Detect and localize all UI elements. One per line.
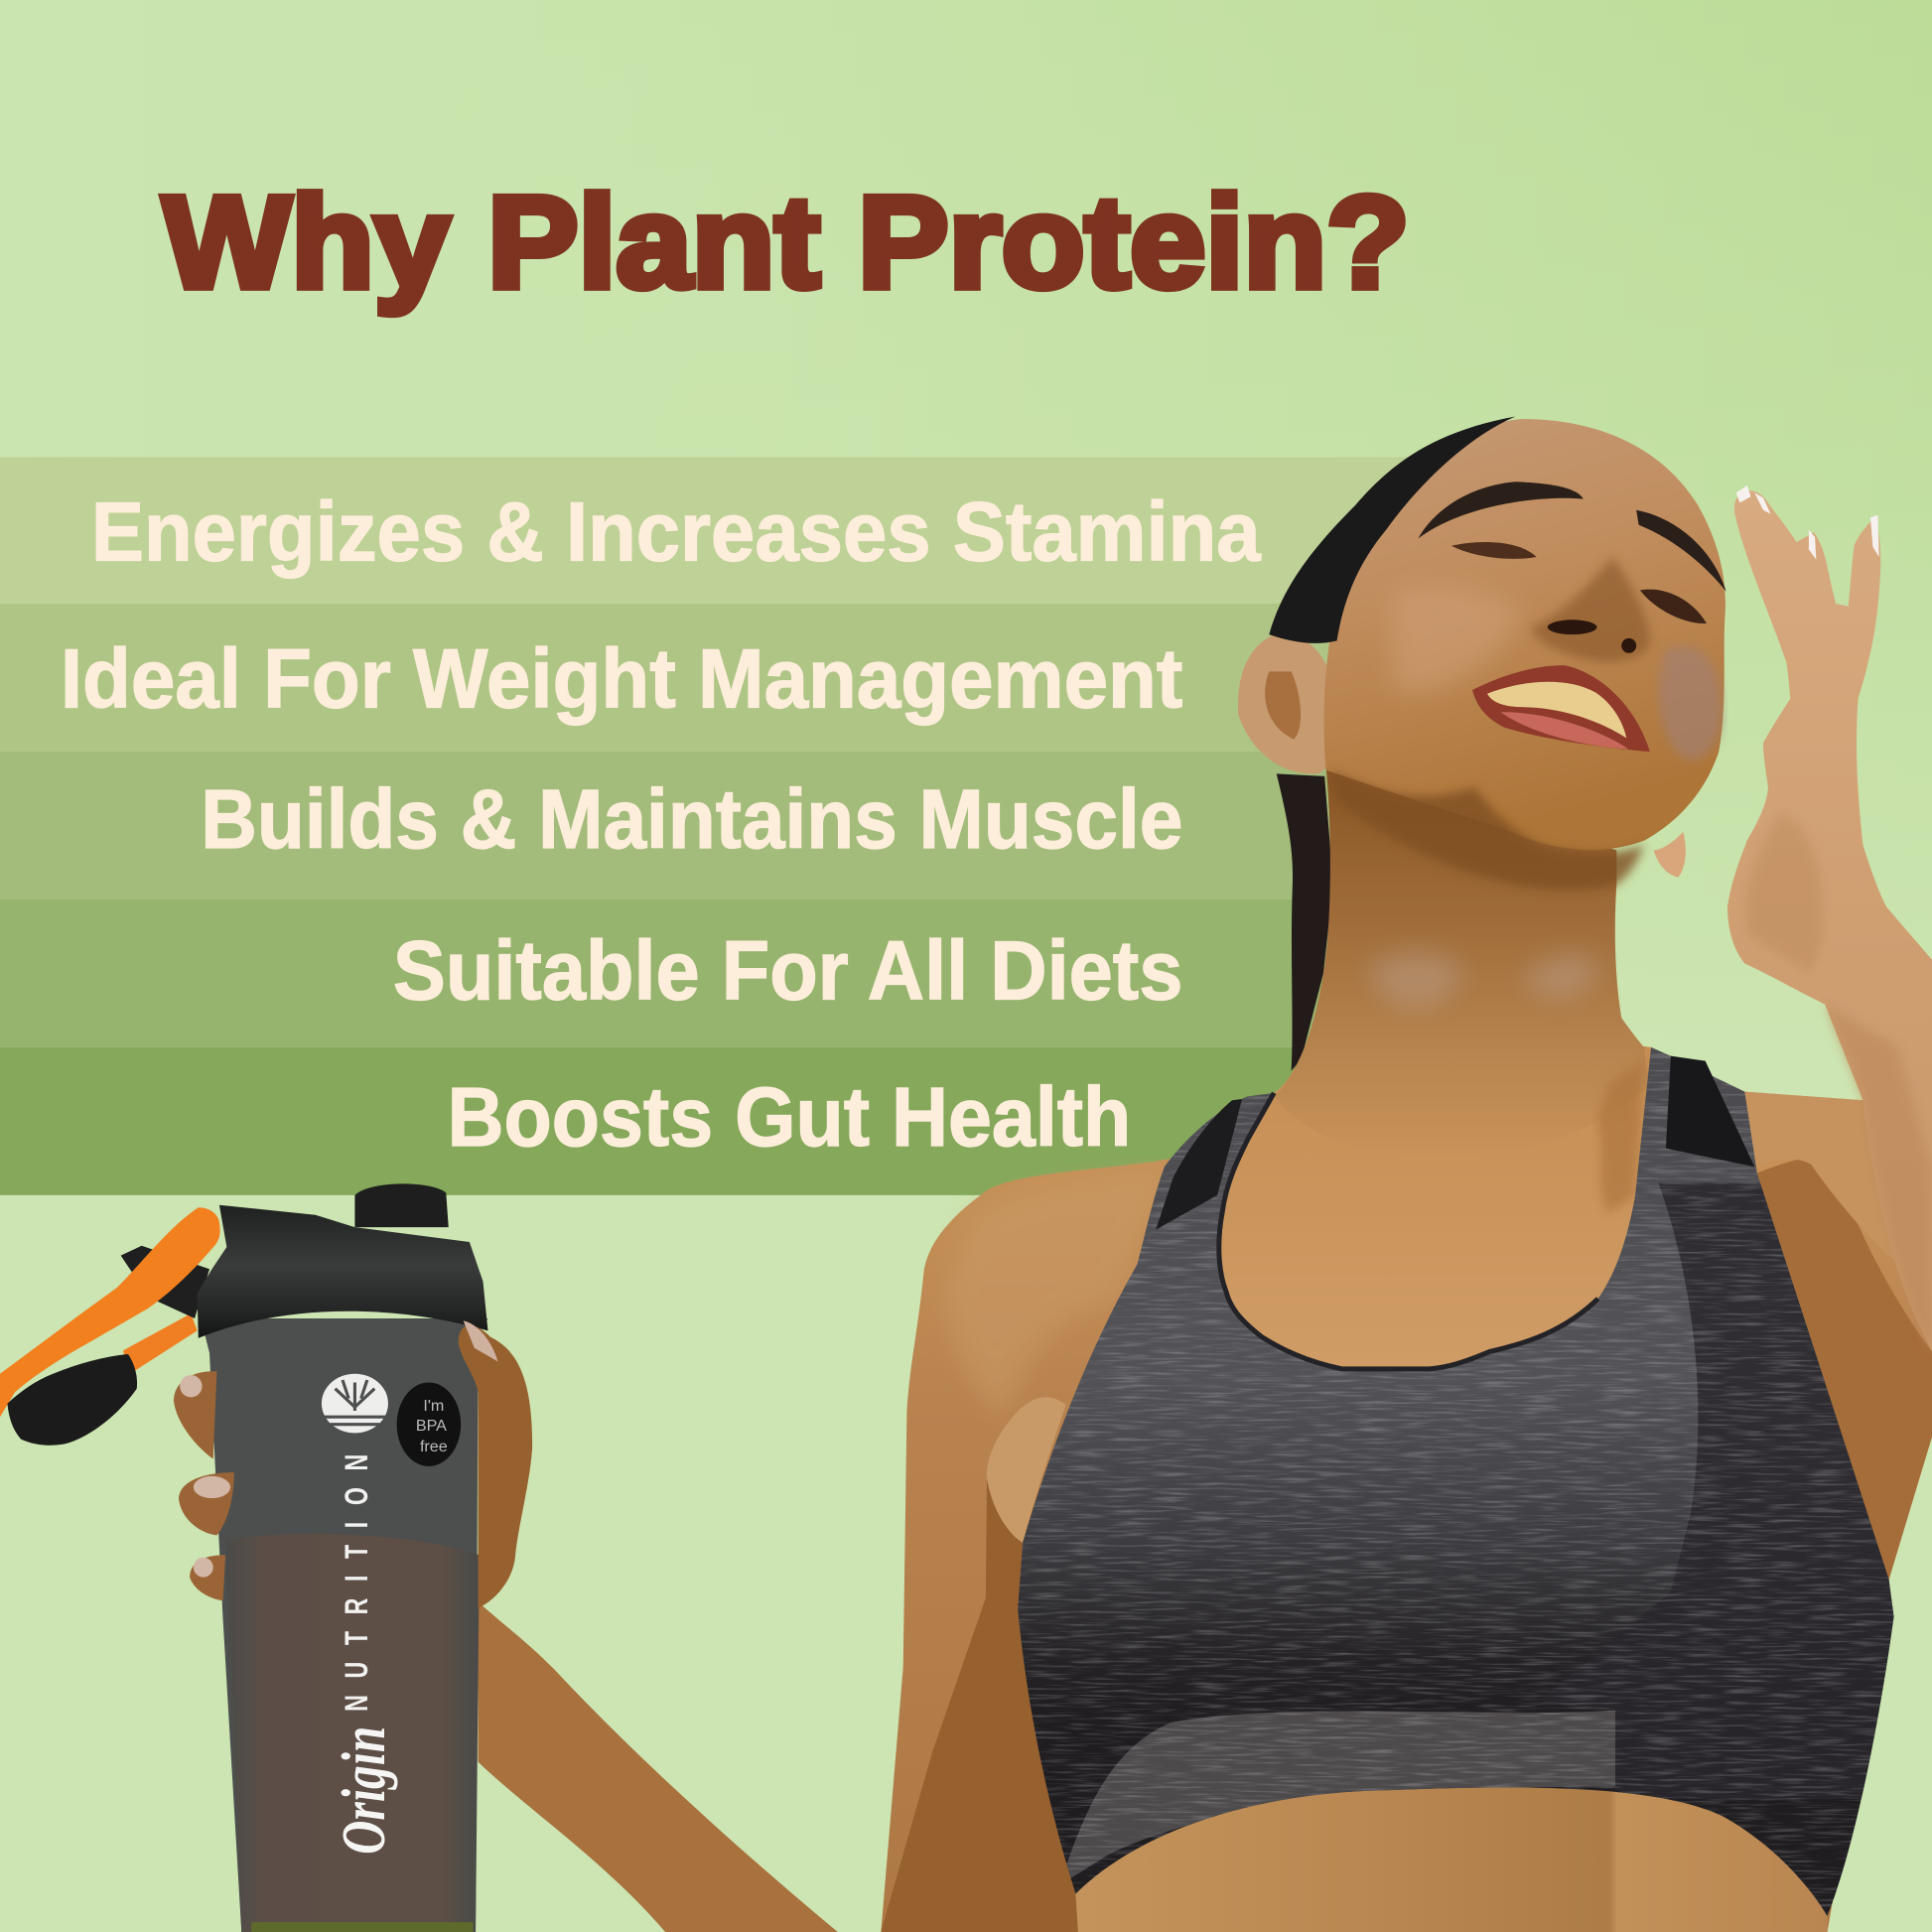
title: Why Plant Protein? <box>163 169 1410 315</box>
cheek highlight <box>1392 587 1522 692</box>
black strap right <box>1666 1056 1754 1167</box>
flip cap <box>7 1354 137 1446</box>
ear inner <box>1265 671 1301 740</box>
band: weight management: Ideal For Weight Management <box>61 631 1182 725</box>
photo: shaker bottle <box>0 1183 532 1932</box>
cheek shade <box>1659 646 1722 760</box>
head <box>1324 419 1725 850</box>
neck highlights <box>1368 951 1601 1010</box>
upper arm right shade <box>1757 1157 1932 1580</box>
BPA badge <box>397 1382 461 1466</box>
photo: woman <box>881 416 1932 1932</box>
BPA badge: free <box>420 1438 448 1455</box>
bottle wordmark nutrition: NUTRITION <box>339 1454 374 1712</box>
band: gut health: Boosts Gut Health <box>448 1070 1131 1164</box>
torso and arms skin <box>881 1047 1932 1932</box>
bottom green residue <box>251 1922 474 1932</box>
BPA badge: I'm <box>423 1397 444 1415</box>
orange strap lower <box>123 1313 198 1375</box>
eye right <box>1640 590 1707 623</box>
neck <box>1274 763 1651 1160</box>
arm holding shaker <box>479 1601 838 1932</box>
bra shading <box>1011 1035 1922 1932</box>
lid top cap <box>354 1183 449 1227</box>
bottle wordmark origin: Origin <box>331 1726 398 1855</box>
nails <box>1736 485 1879 559</box>
ear <box>1238 632 1337 774</box>
ear back <box>1654 832 1686 878</box>
bra lit band <box>1059 1711 1615 1885</box>
mouth <box>1472 665 1650 752</box>
palm shading <box>1745 813 1824 973</box>
bra right dark area <box>1540 1182 1922 1799</box>
band: energizes: Energizes & Increases Stamina <box>91 485 1262 579</box>
hair <box>1269 416 1516 643</box>
bra knit texture <box>1011 1035 1910 1932</box>
lower lip <box>1501 712 1629 750</box>
band: gut health <box>0 1047 1417 1195</box>
upper body highlight <box>948 1171 1165 1417</box>
band: diets: Suitable For All Diets <box>393 924 1182 1018</box>
fingers <box>174 1371 234 1600</box>
abdomen <box>1075 1788 1828 1932</box>
flip arm orange <box>0 1207 220 1417</box>
BPA badge: BPA <box>416 1417 447 1435</box>
shoulder right <box>1744 1092 1903 1269</box>
nose <box>1532 557 1650 662</box>
chest strap shadow <box>1596 1059 1645 1213</box>
panel: benefits list <box>0 457 1417 1195</box>
bottle body <box>201 1318 487 1932</box>
eyebrow right <box>1636 510 1726 592</box>
lid <box>198 1205 487 1338</box>
forearm and raised hand <box>1727 490 1932 1351</box>
band: weight management <box>0 604 1417 752</box>
cap hinge <box>121 1246 209 1318</box>
shake liquid <box>225 1534 480 1932</box>
logo <box>322 1374 388 1433</box>
band: diets <box>0 899 1417 1047</box>
thumb and hand <box>459 1325 532 1608</box>
ponytail <box>1277 773 1333 1070</box>
thumb nail <box>464 1320 497 1361</box>
bra neckline trim <box>1219 1093 1598 1369</box>
forearm inner shade <box>1825 1004 1932 1351</box>
band: muscle: Builds & Maintains Muscle <box>201 772 1182 866</box>
left arm shadow <box>881 1478 1078 1932</box>
eye left <box>1451 542 1537 559</box>
black strap left <box>1156 1099 1242 1230</box>
band: muscle <box>0 752 1417 899</box>
jaw shadow <box>1330 770 1645 890</box>
band: energizes <box>0 457 1417 605</box>
chest <box>1219 1023 1651 1369</box>
teeth <box>1487 682 1626 738</box>
nostrils <box>1548 620 1636 653</box>
sports bra <box>1011 1035 1922 1932</box>
finger nails <box>180 1375 230 1578</box>
breast fold <box>987 1397 1066 1543</box>
eyebrow left <box>1418 482 1584 538</box>
